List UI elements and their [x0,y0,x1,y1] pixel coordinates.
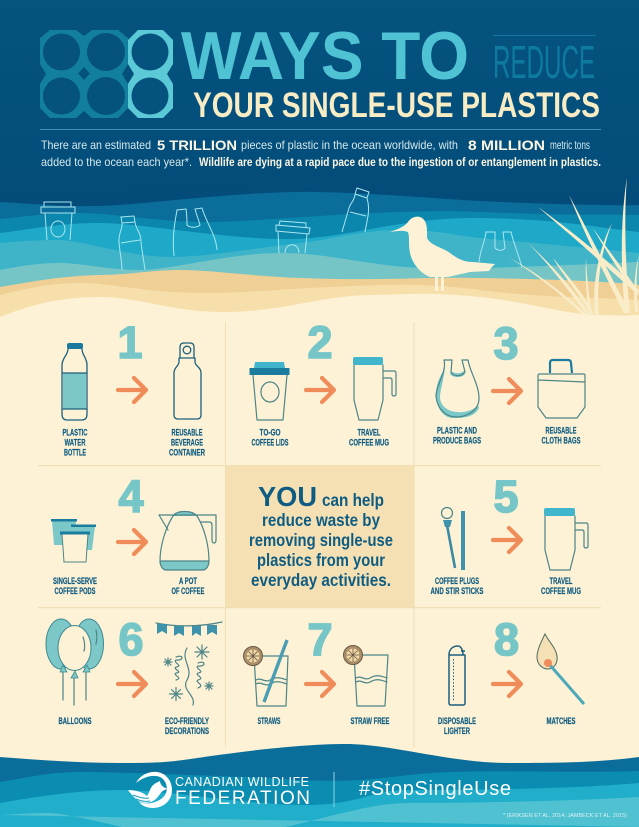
hashtag: #StopSingleUse [359,778,511,800]
callout text: everyday activities. [251,570,391,590]
label: PLASTIC AND [437,426,477,436]
heading: ways to: WAYS TO [181,18,469,94]
number 6: 6 [118,614,144,665]
label: COFFEE MUG [541,586,581,596]
footer waves [0,744,639,827]
icon: coffee pods [51,519,96,562]
footnote: * (ERIKSEN ET AL. 2014; JAMBECK ET AL. 2015) [503,813,627,819]
number 3: 3 [493,318,519,369]
header background [0,0,639,240]
item 1: plastic bottle to reusable container [62,317,205,458]
icon: coffee plugs and stir sticks [442,508,465,570]
label [541,576,581,596]
icon: floating bag 2 [479,232,522,268]
label: OF COFFEE [172,586,204,596]
icon: floating cup [41,202,75,240]
label: WATER [64,438,86,448]
label: DECORATIONS [165,726,209,736]
label [169,428,205,458]
icon: floating bottle [119,216,145,270]
label [438,716,476,736]
label: CONTAINER [169,448,205,458]
icon: cloth bag [538,360,585,418]
label [349,428,389,448]
label: TRAVEL [358,428,381,438]
label: BEVERAGE [171,438,203,448]
icon: plastic water bottle [62,343,87,420]
arrow [493,528,521,552]
arrow [118,672,146,696]
item 8: lighter to matches [438,614,584,736]
icon: travel mug [353,357,396,420]
icon: plastic bag [436,360,479,418]
label: BALLOONS [58,716,92,726]
arrow [118,378,146,402]
label: TO-GO [260,428,280,438]
beach grass [508,177,639,316]
intro text: 5 TRILLION [157,137,237,153]
intro text: There are an estimated [41,138,151,152]
arrow [306,378,334,402]
callout text [249,481,393,590]
item 2: coffee lids to travel mug [250,317,396,448]
icon: reusable beverage container [174,343,201,419]
icon: floating bag [173,208,217,256]
icon: glass with straw [244,640,288,706]
icon: streamers and stars [164,645,213,705]
label [62,428,88,458]
item 5: coffee plugs to travel mug [430,471,588,596]
text: federation: FEDERATION [175,788,310,809]
ocean waves [0,192,639,330]
icon: balloons [46,619,104,705]
intro text: pieces of plastic in the ocean worldwide, with [241,138,458,152]
beach sand [0,270,639,340]
icon: to-go cup [250,362,290,420]
label: REUSABLE [546,426,576,436]
icon: bunting [156,622,222,636]
arrow [493,672,521,696]
label: SINGLE-SERVE [53,576,97,586]
intro text: 8 MILLION [468,137,545,153]
text: canadian wildlife: CANADIAN WILDLIFE [175,775,309,789]
logo: canadian wildlife federation [128,772,310,809]
number 1: 1 [117,317,143,368]
label: MATCHES [546,716,576,726]
number 4: 4 [118,471,144,522]
label: STRAWS [258,716,280,726]
grid dividers [38,322,601,747]
number 8: 8 [494,614,519,665]
icon: match [537,634,584,704]
label: COFFEE PODS [54,586,96,596]
label [252,428,288,448]
callout text: reduce waste by [262,510,380,530]
icon: coffee pot [159,512,216,570]
center callout panel [225,466,414,607]
label: LIGHTER [444,726,470,736]
number 5: 5 [493,471,519,522]
item 4: coffee pods to pot of coffee [51,471,216,596]
icon: six-pack plastic rings [40,30,173,118]
label: COFFEE PLUGS [435,576,479,586]
item 3: plastic bags to cloth bags [433,318,585,446]
label [53,576,97,596]
item 6: balloons to decorations [46,614,222,736]
callout text: can help [322,490,384,510]
icon: floating tilted bottle [342,188,369,232]
label: BOTTLE [64,448,86,458]
cream panel background [0,294,639,765]
label [542,426,580,446]
item 7: straws to straw free [244,614,390,726]
icon: floating cup 2 [276,221,310,253]
floating plastic litter outlines [41,188,522,270]
title block [40,18,600,125]
label [172,576,204,596]
intro text: added to the ocean each year*. [41,155,192,169]
label: COFFEE MUG [349,438,389,448]
icon: travel mug [544,508,588,570]
label: CLOTH BAGS [542,436,580,446]
label [433,426,481,446]
label: COFFEE LIDS [252,438,288,448]
callout text: removing single-use [249,530,393,550]
number 2: 2 [307,317,333,368]
label: AND STIR STICKS [430,586,484,596]
label: PRODUCE BAGS [433,436,481,446]
callout text: plastics from your [257,550,385,570]
icon: glass without straw [344,646,388,706]
callout text: YOU [258,481,317,512]
arrow [306,672,334,696]
label [165,716,209,736]
label: REUSABLE [172,428,202,438]
label: PLASTIC [62,428,88,438]
number 7: 7 [307,614,333,665]
arrow [493,379,521,403]
arrow [118,530,146,554]
label [430,576,484,596]
label: STRAW FREE [350,716,390,726]
label: TRAVEL [550,576,573,586]
label: A POT [179,576,197,586]
label: ECO-FRIENDLY [165,716,209,726]
seagull [390,217,495,291]
intro text: metric tons [550,138,590,152]
icon: bird emblem [128,772,172,808]
label: DISPOSABLE [438,716,476,726]
icon: disposable lighter [449,646,465,705]
intro text [41,137,601,169]
